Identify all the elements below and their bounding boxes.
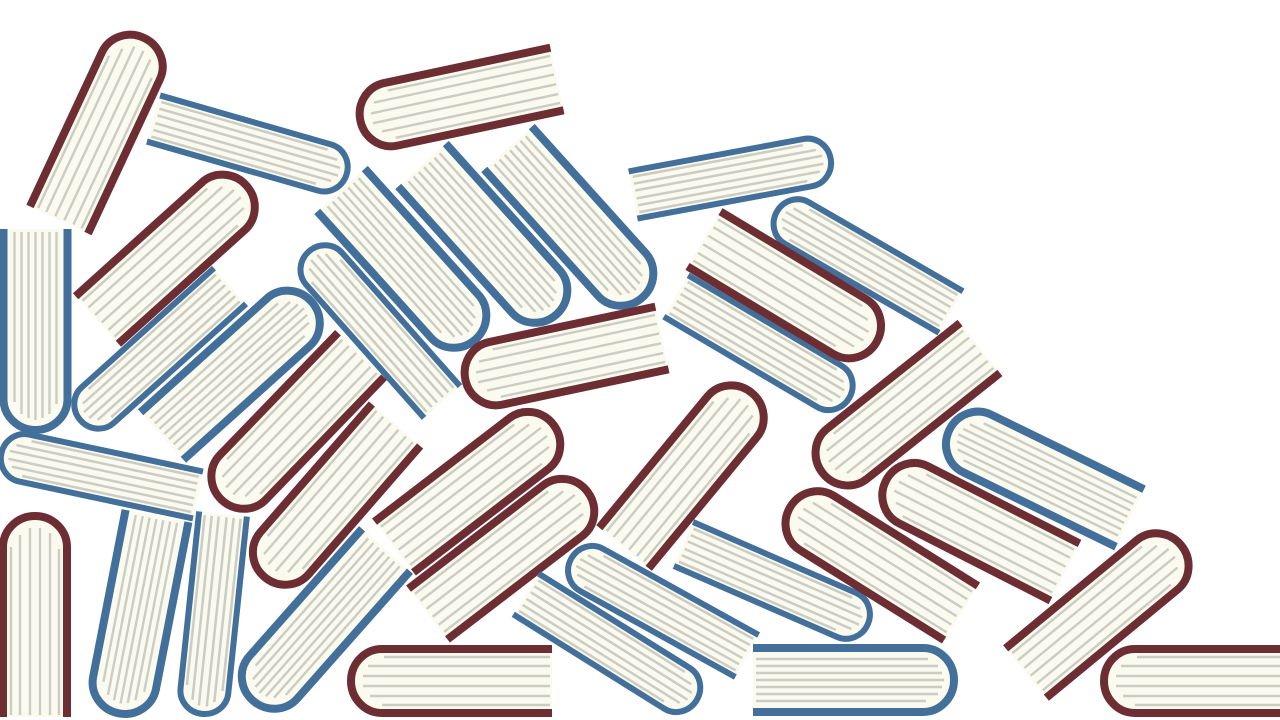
book: blue, narrow bottom left — [178, 511, 247, 716]
book: red, flat bottom right — [1104, 649, 1280, 713]
book: red, lower right 2 — [871, 452, 1080, 601]
book: blue, standing left — [4, 229, 68, 430]
book: blue, leaning right 2 — [398, 144, 580, 336]
book: blue, flat bottom right of centre — [753, 648, 954, 712]
book: blue, bottom diagonal — [229, 529, 410, 720]
book: red, left leaning — [76, 162, 268, 344]
book: red, top centre — [354, 48, 564, 152]
book: blue, narrow centre — [291, 236, 460, 418]
book: blue, right — [935, 401, 1144, 547]
book: blue, narrow left — [65, 268, 246, 438]
book: red, centre flat — [459, 307, 669, 411]
book: blue, left diagonal — [141, 278, 333, 460]
book: red, standing bottom left — [3, 516, 67, 717]
book: red, flat bottom centre — [351, 649, 552, 713]
book: blue, narrow top right — [629, 135, 835, 219]
book: red, centre diagonal upper — [375, 399, 573, 572]
book: red, top left leaning — [30, 24, 173, 234]
book: red, centre right — [688, 212, 893, 370]
book: blue, top left narrow — [147, 95, 353, 197]
book: red, spine down lower — [240, 404, 420, 598]
book: red, lower right 1 — [774, 479, 978, 640]
book: red, spine down centre left — [198, 333, 384, 522]
book: red, right diagonal upper — [803, 323, 1000, 498]
book: blue, narrow lower centre 3 — [560, 538, 759, 677]
book: blue, narrow lower centre 1 — [513, 574, 709, 720]
book: blue, bottom left tilted — [87, 510, 188, 719]
book: blue, narrow right of centre — [765, 191, 963, 333]
book: blue, narrow flat left — [0, 430, 203, 518]
book: blue, narrow under red — [664, 275, 861, 419]
book: blue, narrow lower centre 2 — [674, 522, 877, 646]
book: blue, leaning right 1 — [317, 169, 499, 361]
book: red, centre diagonal lower — [409, 466, 607, 639]
book: blue, leaning right 3 — [484, 127, 666, 319]
book: red, far right diagonal — [1006, 520, 1201, 698]
book: red, steep centre — [599, 373, 777, 568]
